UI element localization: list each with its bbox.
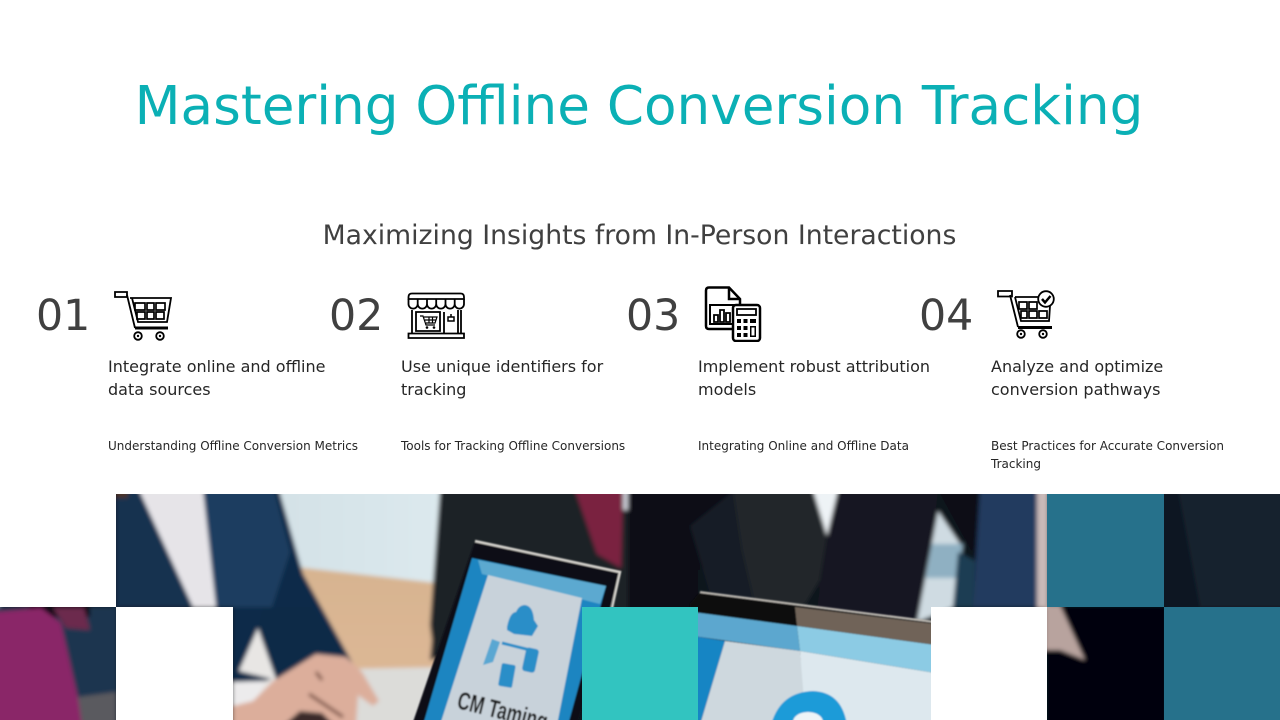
woman's jacket [116,490,353,690]
step heading: data sources [108,380,211,399]
step topic: Integrating Online and Offline Data [698,439,909,453]
office photo [0,490,1280,720]
right dark sleeve [1164,490,1280,608]
man's suit and tie [430,490,628,660]
white square top left [0,494,116,607]
aqua square [582,607,698,720]
panel: step 02 [329,291,625,453]
white square lower right [931,607,1047,720]
step heading [991,357,1163,399]
panel: step 04 [919,290,1224,471]
panel: step 03 [626,286,930,453]
icon: shopping cart [114,291,172,341]
step topic: Understanding Offline Conversion Metrics [108,439,358,453]
laptop right [690,592,935,720]
teal square upper right [1047,493,1164,607]
number 02: 02 [329,291,383,341]
white square lower left [116,607,233,720]
hand [233,654,379,720]
step heading [698,357,930,399]
step heading: Use unique identifiers for [401,357,603,376]
number 01: 01 [36,291,90,341]
step heading [401,357,604,399]
dark lower right with skin [1047,607,1165,720]
photo banner with colour squares [0,494,1280,720]
title: Mastering Offline Conversion Tracking [135,75,1143,137]
step topic: Best Practices for Accurate Conversion [991,439,1224,453]
screen icons [507,605,538,636]
laptop left [412,541,620,720]
step heading [108,357,325,399]
step heading: Analyze and optimize [991,357,1163,376]
panel: step 01 [36,291,358,453]
step heading: tracking [401,380,466,399]
left lower block [0,607,117,720]
step topic: Tracking [991,457,1041,471]
teal square lower right [1164,607,1280,720]
cloud on screen [771,691,847,720]
number 04: 04 [919,291,973,341]
wall, desk and table [270,490,445,585]
icon: report and calculator [704,286,762,342]
step heading: Integrate online and offline [108,357,325,376]
number 03: 03 [626,291,680,341]
step topic: Tools for Tracking Offline Conversions [401,439,625,453]
subtitle: Maximizing Insights from In-Person Interactions [323,220,956,251]
icon: cart with check [997,290,1055,339]
step heading: Implement robust attribution [698,357,930,376]
step heading: conversion pathways [991,380,1160,399]
step topic [990,439,1224,471]
icon: storefront [408,292,465,339]
step heading: models [698,380,756,399]
